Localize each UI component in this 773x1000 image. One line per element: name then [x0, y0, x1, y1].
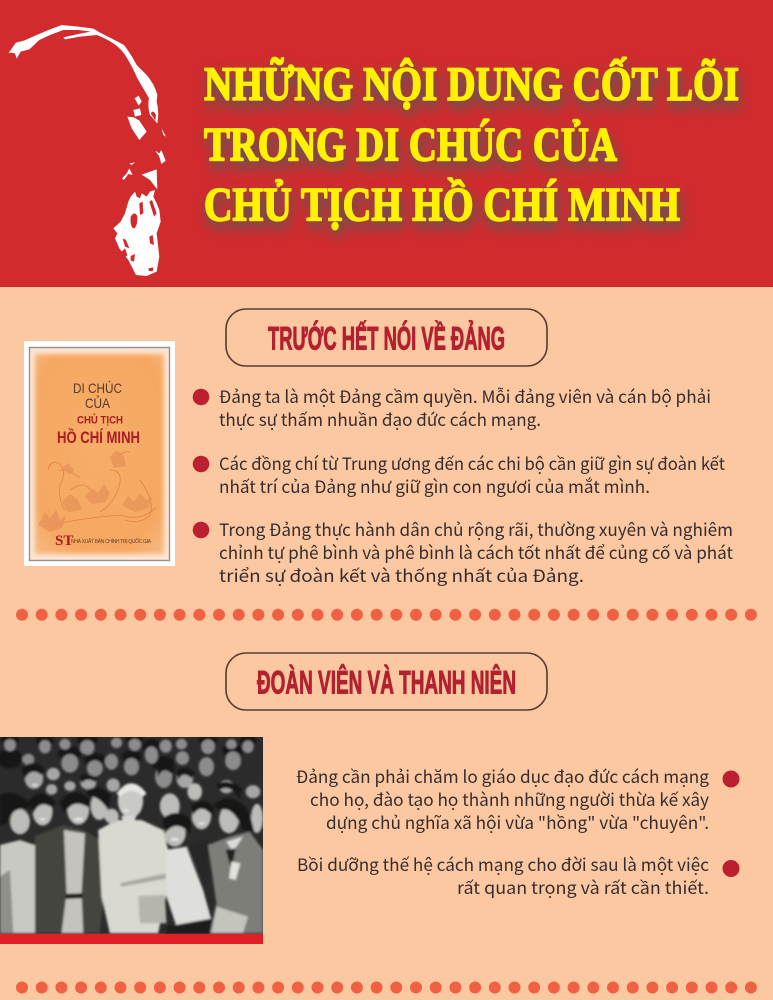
bullet 1: Đảng cần phải chăm lo giáo dục đạo đức cách mạng: [296, 763, 709, 788]
bullet 1: Đảng ta là một Đảng cầm quyền. Mỗi đảng viên và cán bộ phải: [219, 383, 711, 408]
image: testament book cover: NHÀ XUẤT BẢN CHÍNH TRỊ QUỐC GIA: [71, 538, 152, 545]
bullet list: youth: [296, 763, 740, 899]
photo red bar: [0, 934, 263, 944]
panel: youth section: [0, 653, 739, 944]
hair: [0, 763, 255, 833]
bullet 2: nhất trí của Đảng như giữ gìn con ngươi của mắt mình.: [219, 473, 650, 498]
title: [204, 56, 739, 232]
image: testament book cover: ST: [55, 533, 73, 549]
heading: party: TRƯỚC HẾT NÓI VỀ ĐẢNG: [268, 320, 505, 356]
dotted separator 2: [16, 982, 757, 994]
image: testament book cover: HỒ CHÍ MINH: [57, 428, 140, 447]
bullet 2: Các đồng chí từ Trung ương đến các chi bộ cần giữ gìn sự đoàn kết: [219, 450, 726, 475]
title: TRONG DI CHÚC CỦA: [204, 118, 617, 172]
bullet 1: cho họ, đào tạo họ thành những người thừa kế xây: [310, 786, 709, 811]
bullet 2: Bồi dưỡng thế hệ cách mạng cho đời sau là một việc: [297, 851, 709, 876]
bullet 3: Trong Đảng thực hành dân chủ rộng rãi, thường xuyên và nghiêm: [219, 516, 733, 541]
dotted separator 1: [16, 609, 757, 621]
bullet 2: [193, 450, 726, 498]
bullet 1: [193, 383, 711, 431]
bullet 2: [297, 851, 740, 899]
heading: youth: ĐOÀN VIÊN VÀ THANH NIÊN: [257, 664, 516, 700]
image: testament book cover: DI CHÚC: [73, 380, 122, 396]
image: testament book cover: [24, 341, 175, 566]
header banner: [0, 0, 773, 287]
image: testament book cover: CỦA: [85, 394, 111, 411]
panel: party section: [24, 309, 734, 587]
bullet 3: chỉnh tự phê bình và phê bình là cách tốt nhất để củng cố và phát: [219, 539, 734, 564]
title: CHỦ TỊCH HỒ CHÍ MINH: [204, 176, 680, 232]
decoration: lotus flowers: [38, 450, 156, 532]
clothes: [0, 840, 38, 933]
bullet list: party: [193, 383, 734, 587]
icon: Ho Chi Minh silhouette: [8, 25, 166, 276]
bullet 1: [296, 763, 740, 834]
bullet 3: triển sự đoàn kết và thống nhất của Đảng.: [219, 562, 584, 587]
smiles: [32, 784, 205, 841]
image: testament book cover: CHỦ TỊCH: [77, 414, 123, 426]
bullet 1: thực sự thấm nhuần đạo đức cách mạng.: [219, 406, 541, 431]
back-row hair: [0, 733, 256, 771]
image: photo of Ho Chi Minh with youth: [0, 730, 263, 934]
heading: party: [226, 309, 547, 366]
front faces: [10, 783, 263, 847]
bullet 1: dựng chủ nghĩa xã hội vừa "hồng" vừa "chuyên".: [326, 809, 709, 834]
bullet 3: [193, 516, 734, 587]
bullet 2: rất quan trọng và rất cần thiết.: [457, 874, 709, 899]
heading: youth: [226, 653, 547, 710]
